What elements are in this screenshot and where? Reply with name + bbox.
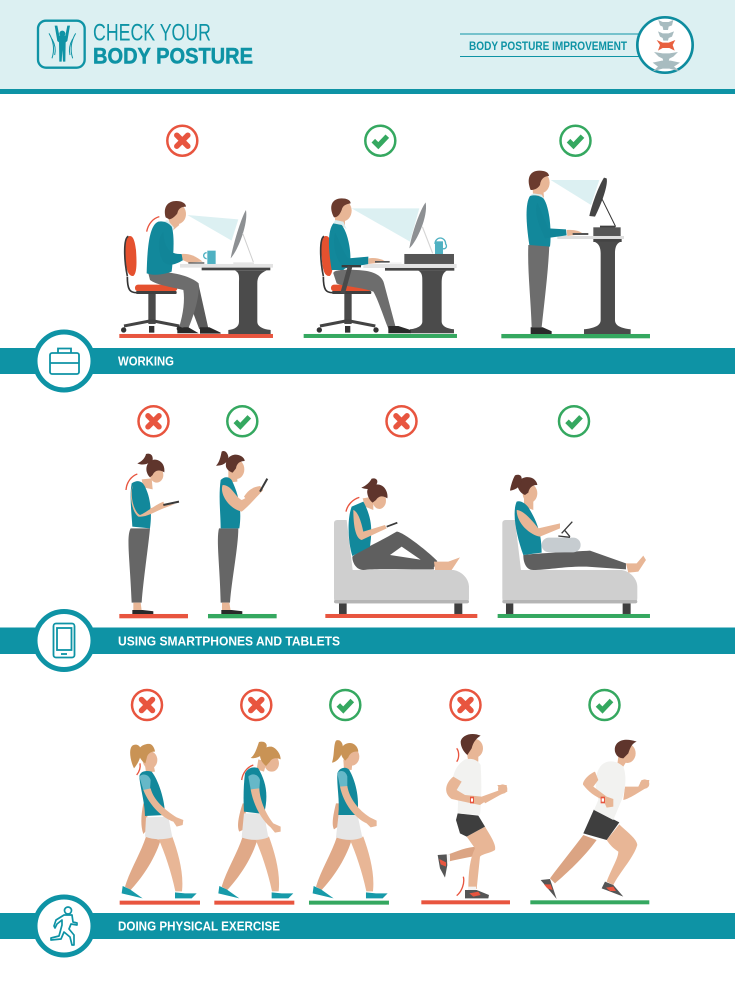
figure: woman bending over phone — [119, 454, 188, 618]
icon: smartphone — [54, 624, 74, 658]
icon: wrong mark, hunched sitting — [167, 126, 197, 156]
figure: man running upright — [421, 734, 510, 904]
icon: correct mark, phone raised — [227, 406, 257, 436]
icon: runner — [51, 907, 77, 945]
title: BODY POSTURE — [93, 44, 253, 68]
section band: smartphones and tablets — [0, 612, 735, 670]
figure: woman holding phone at eye level — [208, 451, 277, 618]
section band: smartphones and tablets: USING SMARTPHONES AND TABLETS — [118, 634, 340, 648]
row 1 status icons — [167, 126, 591, 156]
title: CHECK YOUR — [93, 20, 211, 46]
icon: correct mark, leaning running — [590, 690, 620, 720]
figure: woman walking with head tilted back — [120, 744, 200, 905]
figure: man at standing desk — [501, 171, 650, 338]
icon: body posture logo — [38, 21, 85, 68]
section band: working: WORKING — [118, 354, 174, 368]
icon: wrong mark, head back walking — [132, 690, 162, 720]
header band — [0, 0, 735, 94]
icon: correct mark, standing desk — [560, 126, 590, 156]
figure: hunched man at desk — [119, 201, 273, 338]
figure: woman slouching on sofa — [325, 478, 477, 618]
figure: upright man at desk — [304, 198, 457, 338]
icon: correct mark, tablet on pillow — [559, 406, 589, 436]
subtitle: body posture improvement: BODY POSTURE IMPROVEMENT — [469, 39, 628, 53]
figure: woman walking with head down — [214, 742, 294, 905]
section band: physical exercise — [0, 897, 735, 955]
icon: briefcase — [50, 348, 79, 374]
icon: wrong mark, head down walking — [241, 690, 271, 720]
row 2 status icons — [138, 406, 589, 436]
title — [93, 20, 253, 68]
section band: working — [0, 332, 735, 390]
figure: woman using tablet on pillow — [498, 475, 650, 618]
section band: physical exercise: DOING PHYSICAL EXERCISE — [118, 918, 280, 934]
icon: wrong mark, slouching on sofa — [386, 406, 416, 436]
icon: wrong mark, upright running — [450, 690, 480, 720]
subtitle: body posture improvement — [460, 34, 642, 56]
icon: spine — [637, 17, 693, 73]
figure: man running leaning forward — [530, 740, 649, 904]
icon: correct mark, upright walking — [330, 690, 360, 720]
row 3 status icons — [132, 690, 620, 720]
icon: correct mark, upright sitting — [365, 126, 395, 156]
figure: woman walking upright — [309, 740, 389, 905]
icon: wrong mark, head bent over phone — [138, 406, 168, 436]
